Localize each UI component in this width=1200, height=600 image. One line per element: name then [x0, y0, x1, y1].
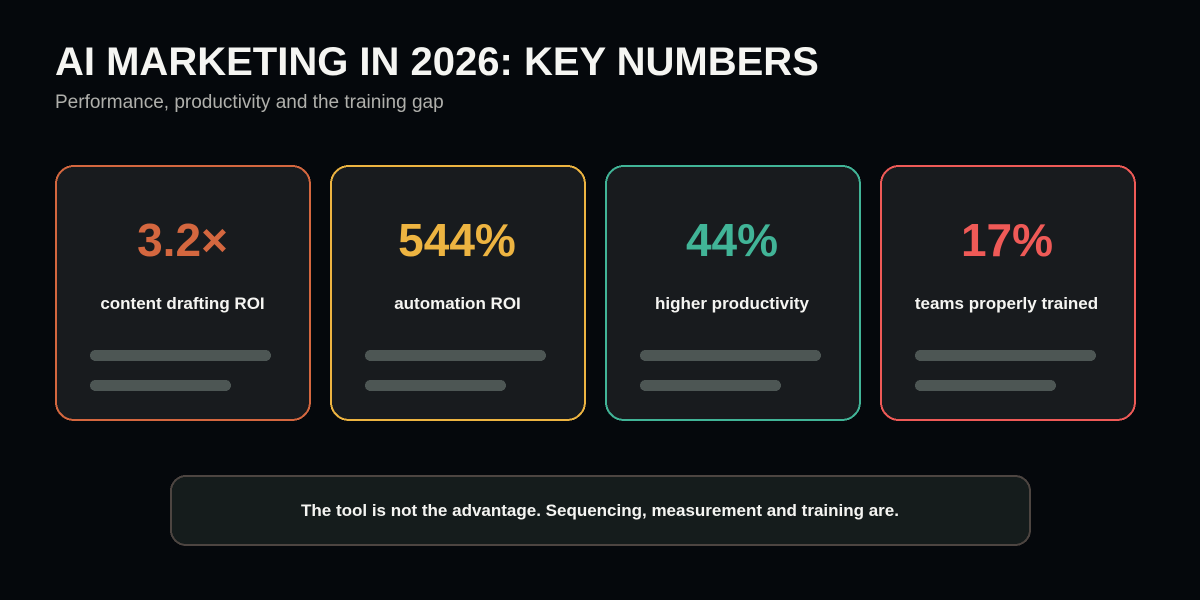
placeholder bar short: [915, 380, 1056, 391]
placeholder bar long: [640, 350, 821, 361]
placeholder bar short: [640, 380, 781, 391]
callout text: The tool is not the advantage. Sequencing, measurement and training are.: [301, 501, 899, 520]
stat: 44%: 44%: [686, 214, 778, 266]
label: teams properly trained: teams properly trained: [915, 294, 1098, 313]
stat: 17%: 17%: [961, 214, 1053, 266]
label: higher productivity: higher productivity: [655, 294, 810, 313]
callout: [171, 476, 1030, 545]
stat: 544%: 544%: [398, 214, 516, 266]
title: AI MARKETING IN 2026: KEY NUMBERS: [55, 40, 819, 84]
panel: higher productivity: [606, 166, 860, 420]
placeholder bar long: [915, 350, 1096, 361]
placeholder bar long: [365, 350, 546, 361]
stat: 3.2x: 3.2×: [137, 214, 228, 266]
placeholder bar short: [90, 380, 231, 391]
subtitle: Performance, productivity and the training gap: [55, 92, 444, 113]
panel: teams properly trained: [881, 166, 1135, 420]
label: content drafting ROI: content drafting ROI: [100, 294, 265, 313]
placeholder bar long: [90, 350, 271, 361]
label: automation ROI: automation ROI: [394, 294, 521, 313]
panel: automation ROI: [331, 166, 585, 420]
placeholder bar short: [365, 380, 506, 391]
panel: content drafting ROI: [56, 166, 310, 420]
